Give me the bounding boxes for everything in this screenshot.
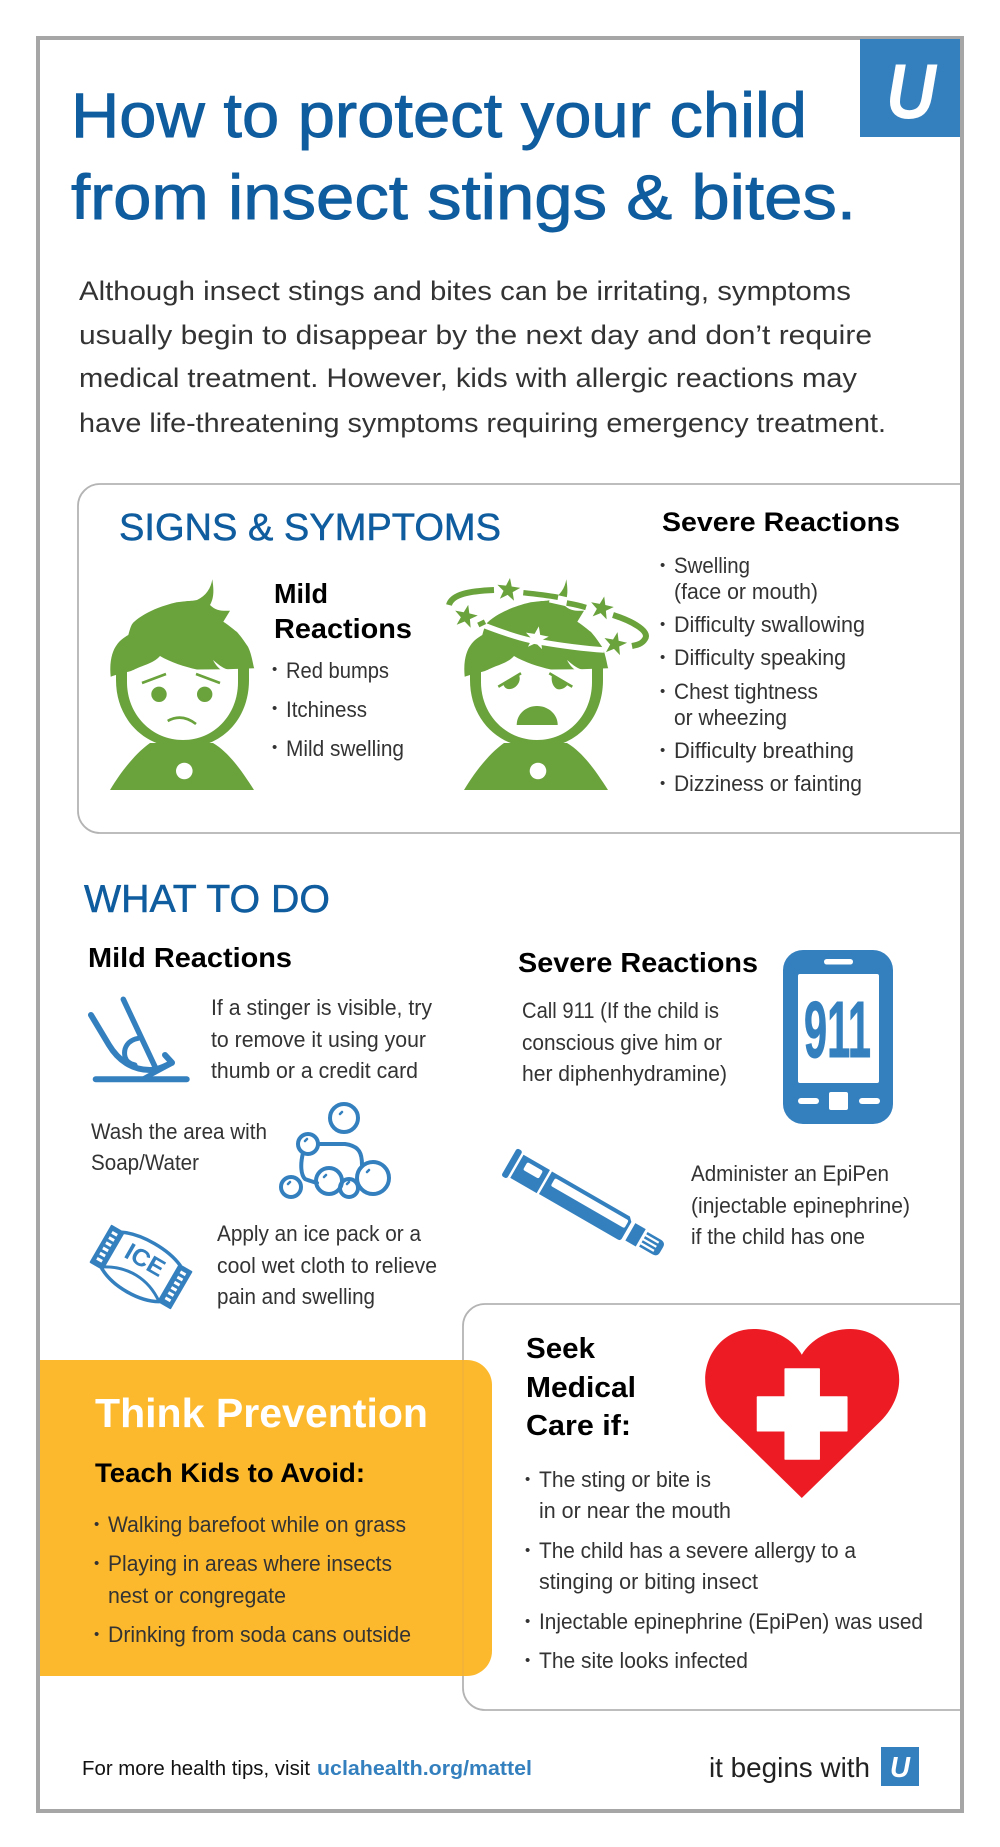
text: severe reactions list: Swelling: [674, 553, 750, 578]
text: remove stinger: [211, 995, 432, 1083]
text: administer epipen: if the child has one: [691, 1224, 865, 1249]
text: severe reactions list: Difficulty breathing: [674, 738, 854, 763]
icon: epipen: [501, 1148, 670, 1264]
text: severe reactions list: Difficulty swallowing: [674, 612, 865, 637]
text: mild reactions list: Mild: [274, 578, 328, 609]
heading: what to do: WHAT TO DO: [84, 878, 330, 921]
text: seek care reasons: Injectable epinephrine (EpiPen) was used: [539, 1609, 923, 1634]
text: seek care reasons: [525, 1467, 923, 1673]
text: mild reactions list: Itchiness: [286, 697, 367, 722]
icon: ice pack: ICE: [120, 1238, 170, 1283]
text: seek care reasons: The site looks infected: [539, 1648, 748, 1673]
text: mild reactions list: Red bumps: [286, 658, 389, 683]
intro paragraph: have life-threatening symptoms requiring emergency treatment.: [79, 408, 886, 438]
text: mild reactions list: Mild swelling: [286, 736, 404, 761]
text: severe reactions list: (face or mouth): [674, 579, 818, 604]
text: prevention list: •: [94, 1516, 99, 1533]
text: ice pack: cool wet cloth to relieve: [217, 1253, 437, 1278]
text: seek care reasons: •: [525, 1542, 530, 1559]
text: prevention list: •: [94, 1626, 99, 1643]
text: severe reactions list: •: [660, 683, 665, 700]
text: seek care reasons: •: [525, 1471, 530, 1488]
heading: signs and symptoms: SIGNS & SYMPTOMS: [119, 507, 501, 549]
panel: seek medical care: [463, 1304, 960, 1710]
intro paragraph: usually begin to disappear by the next day and don’t require: [79, 320, 872, 350]
text: severe reactions list: Chest tightness: [674, 679, 818, 704]
text: call 911: [522, 998, 727, 1086]
text: severe reactions list: •: [660, 616, 665, 633]
text: call 911: conscious give him or: [522, 1030, 722, 1055]
text: seek care reasons: The sting or bite is: [539, 1467, 711, 1492]
text: remove stinger: If a stinger is visible, try: [211, 995, 432, 1020]
text: administer epipen: [691, 1161, 910, 1249]
text: mild reactions list: •: [272, 700, 277, 717]
footer: it begins with U logo: [709, 1747, 919, 1786]
text: severe reactions list: [660, 507, 900, 796]
text: severe reactions list: •: [660, 557, 665, 574]
text: mild reactions list: •: [272, 739, 277, 756]
icon: ice pack: [87, 1221, 194, 1315]
subheading: teach kids to avoid: Teach Kids to Avoid:: [95, 1458, 365, 1488]
text: severe reactions list: Severe Reactions: [662, 507, 900, 537]
icon: removing a stinger: [91, 999, 187, 1080]
icon: phone showing 911: [783, 950, 893, 1124]
text: prevention list: Walking barefoot while on grass: [108, 1512, 406, 1537]
heading: mild reactions: Mild Reactions: [88, 942, 292, 973]
heading: seek medical care: Care if:: [526, 1410, 631, 1442]
intro paragraph: medical treatment. However, kids with allergic reactions may: [79, 363, 858, 393]
intro paragraph: Although insect stings and bites can be irritating, symptoms: [79, 276, 851, 306]
heading: think prevention: Think Prevention: [95, 1390, 428, 1436]
text: ice pack: pain and swelling: [217, 1284, 375, 1309]
text: wash the area: [91, 1119, 267, 1175]
text: mild reactions list: •: [272, 661, 277, 678]
text: prevention list: [94, 1512, 411, 1647]
icon: child with mild reaction: [110, 579, 254, 790]
text: seek care reasons: stinging or biting insect: [539, 1569, 758, 1594]
intro paragraph: [79, 276, 886, 438]
text: severe reactions list: or wheezing: [674, 705, 787, 730]
title: from insect stings & bites.: [71, 163, 856, 233]
text: prevention list: •: [94, 1555, 99, 1572]
text: remove stinger: to remove it using your: [211, 1027, 426, 1052]
footer: health tips link: For more health tips, visit: [82, 1757, 310, 1780]
heading: seek medical care: Seek: [526, 1333, 596, 1365]
heading: seek medical care: Medical: [526, 1372, 636, 1404]
title: [71, 81, 856, 233]
text: prevention list: Playing in areas where insects: [108, 1551, 392, 1576]
text: mild reactions list: [272, 578, 412, 761]
text: administer epipen: Administer an EpiPen: [691, 1161, 889, 1186]
footer: health tips link: [82, 1757, 532, 1780]
text: severe reactions list: Difficulty speaking: [674, 645, 846, 670]
text: seek care reasons: •: [525, 1613, 530, 1630]
panel: think prevention: [40, 1360, 492, 1676]
section: severe reactions steps: [501, 947, 910, 1264]
text: wash the area: Wash the area with: [91, 1119, 267, 1144]
panel: signs and symptoms: [78, 484, 960, 833]
footer: it begins with U logo: it begins with: [709, 1752, 870, 1783]
text: ice pack: [217, 1221, 437, 1309]
logo: U badge: [860, 39, 960, 137]
text: mild reactions list: Reactions: [274, 613, 412, 644]
text: ice pack: Apply an ice pack or a: [217, 1221, 422, 1246]
icon: soap and bubbles: [281, 1104, 389, 1197]
logo: U badge: U: [886, 47, 937, 135]
text: severe reactions list: •: [660, 742, 665, 759]
text: seek care reasons: The child has a severe allergy to a: [539, 1538, 857, 1563]
text: severe reactions list: •: [660, 775, 665, 792]
text: prevention list: nest or congregate: [108, 1583, 286, 1608]
heading: seek medical care: [526, 1333, 636, 1442]
text: severe reactions list: •: [660, 649, 665, 666]
text: seek care reasons: in or near the mouth: [539, 1498, 731, 1523]
icon: child with severe reaction and dizzy stars: [449, 576, 646, 790]
text: call 911: her diphenhydramine): [522, 1061, 727, 1086]
icon: red heart with cross: [705, 1329, 899, 1498]
icon: phone showing 911: 911: [804, 985, 871, 1074]
footer: it begins with U logo: U: [890, 1752, 911, 1784]
text: severe reactions list: Dizziness or fainting: [674, 771, 862, 796]
section: mild reactions steps: [87, 942, 437, 1315]
title: How to protect your child: [71, 81, 807, 151]
text: wash the area: Soap/Water: [91, 1150, 199, 1175]
text: call 911: Call 911 (If the child is: [522, 998, 719, 1023]
text: remove stinger: thumb or a credit card: [211, 1058, 418, 1083]
text: seek care reasons: •: [525, 1652, 530, 1669]
heading: severe reactions: Severe Reactions: [518, 947, 758, 978]
text: administer epipen: (injectable epinephrine): [691, 1193, 910, 1218]
footer: health tips link: uclahealth.org/mattel: [317, 1757, 532, 1780]
text: prevention list: Drinking from soda cans outside: [108, 1622, 411, 1647]
